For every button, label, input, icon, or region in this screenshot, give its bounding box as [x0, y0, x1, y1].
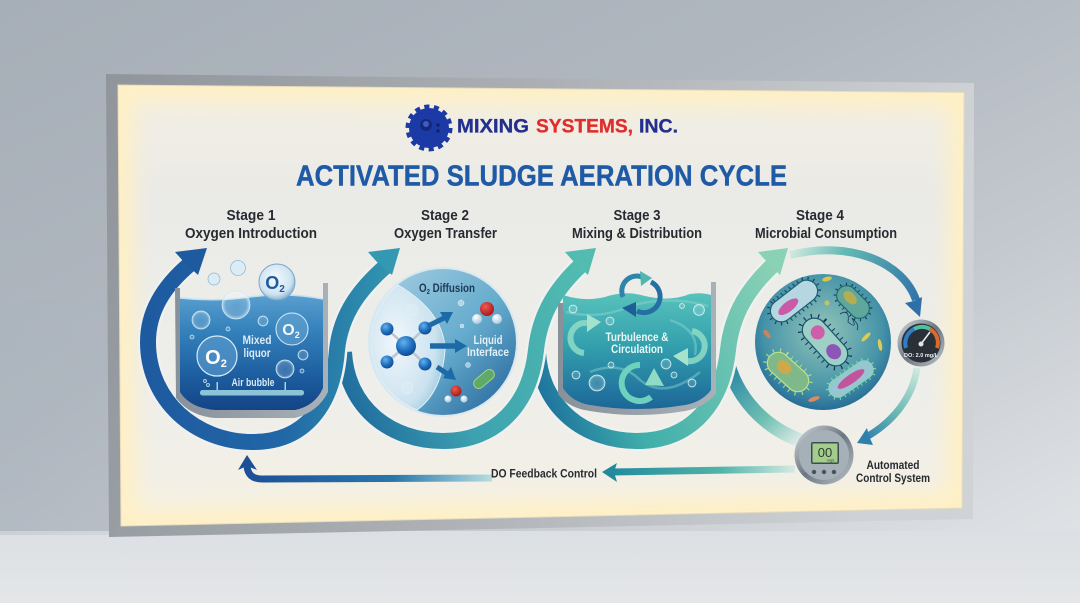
label: DO feedback control: DO Feedback Control: [491, 466, 597, 480]
label: automated control system: Control System: [856, 471, 930, 485]
stage 2 heading: Stage 2: [421, 208, 469, 224]
label: liquid interface: [467, 333, 509, 359]
company name: MIXING: [457, 116, 529, 138]
bubbles: [569, 304, 704, 391]
circulation arrow bottom: [622, 365, 664, 401]
panel: stage 1 aeration tank: [175, 260, 328, 418]
microbe: [472, 367, 496, 391]
title: ACTIVATED SLUDGE AERATION CYCLE: [296, 160, 787, 192]
O2 bubble left: 2: [221, 358, 227, 370]
tank shell: [175, 283, 328, 418]
gas bubble interface: [371, 285, 445, 410]
stage 3 heading: Stage 3: [614, 208, 660, 224]
bacterium top left: [766, 276, 822, 326]
icon: automated controller: [794, 426, 854, 484]
diffusion arrows: [428, 312, 467, 380]
panel: stage 4 microbe circle: [755, 274, 891, 410]
arrow: stage 4 to DO gauge: [790, 250, 922, 317]
water body: [180, 295, 323, 410]
logo: Mixing Systems, Inc.: [408, 107, 678, 149]
company name: INC.: [639, 116, 678, 138]
O2 bubble right: 2: [295, 330, 300, 340]
tank shell: [558, 282, 716, 415]
oxygen molecule: [380, 322, 432, 370]
O2 bubble left: [197, 336, 237, 376]
company name: [457, 116, 678, 138]
arrow: stage 4 tail into controller: [726, 355, 802, 441]
label: O2 diffusion: Diffusion: [430, 283, 475, 295]
lit panel: [118, 85, 964, 526]
label: O2 diffusion: 2: [427, 289, 430, 296]
stage 1 heading: Oxygen Introduction: [185, 226, 317, 242]
bacterium lower left: [763, 348, 813, 396]
company name: SYSTEMS,: [536, 116, 633, 138]
stage 4 heading: [755, 208, 897, 242]
arrow: stage 3 to stage 4 ribbon: [538, 248, 788, 441]
label: mixed liquor: [242, 333, 272, 360]
stage 3 heading: Mixing & Distribution: [572, 226, 702, 242]
swirl bands: [566, 300, 708, 388]
bacterium top right: [832, 281, 874, 323]
stage 2 heading: [394, 208, 497, 242]
icon: automated controller: mg/L: [827, 458, 835, 462]
O2 bubble right: O: [282, 322, 295, 339]
arrow: stage 1 to stage 2 ribbon: [148, 248, 400, 442]
water molecule top: [472, 302, 502, 324]
label: automated control system: Automated: [866, 458, 920, 472]
small bubbles: [401, 300, 470, 394]
icon: automated controller: 00: [818, 445, 832, 460]
label: turbulence and circulation: Turbulence &: [606, 330, 669, 344]
circulation arrow right: [673, 331, 705, 366]
O2 bubble right: [276, 313, 308, 345]
label: O2 diffusion: O: [419, 283, 428, 295]
icon: DO gauge: DO: 2.0 mg/L: [904, 353, 939, 359]
air diffuser: [200, 382, 304, 396]
label: automated control system: [856, 458, 930, 485]
stage 4 heading: Stage 4: [796, 208, 844, 224]
panel: stage 2 oxygen diffusion circle: [368, 267, 518, 417]
panel: stage 3 mixing tank: [558, 271, 716, 415]
label: turbulence and circulation: Circulation: [611, 342, 663, 356]
stage 1 heading: [185, 208, 317, 242]
arrow: feedback return to stage 1: [238, 455, 492, 479]
arrow: controller to feedback label: [602, 463, 795, 482]
label: turbulence and circulation: [606, 330, 669, 356]
circulation arrow top: [622, 271, 660, 317]
bacterium centre: [797, 313, 853, 371]
O2 bubble above water: O: [265, 273, 279, 293]
O2 bubble above water: 2: [279, 284, 285, 295]
stage 2 heading: Oxygen Transfer: [394, 226, 497, 242]
circulation arrow left: [570, 314, 601, 353]
filament: [840, 312, 858, 330]
label: liquid interface: Interface: [467, 345, 509, 359]
bubbles: [190, 260, 308, 386]
stage 1 heading: Stage 1: [226, 208, 276, 224]
small microbes: [762, 276, 883, 403]
arrow: stage 2 to stage 3 ribbon: [344, 248, 596, 441]
bacterium lower right: [825, 357, 877, 401]
arrow: DO gauge to controller: [857, 368, 917, 445]
icon: blue gear: [408, 107, 450, 149]
display frame: [106, 74, 974, 537]
stage 4 heading: Microbial Consumption: [755, 226, 897, 242]
water molecule bottom: [444, 386, 468, 402]
label: liquid interface: Liquid: [474, 333, 502, 347]
O2 bubble left: O: [205, 347, 221, 369]
label: mixed liquor: Mixed: [242, 333, 272, 347]
icon: DO gauge: [898, 320, 944, 366]
O2 bubble above water: [259, 264, 295, 300]
water body: [563, 293, 711, 409]
stage 3 heading: [572, 208, 702, 242]
label: air bubble: Air bubble: [232, 377, 274, 389]
label: mixed liquor: liquor: [244, 346, 271, 360]
